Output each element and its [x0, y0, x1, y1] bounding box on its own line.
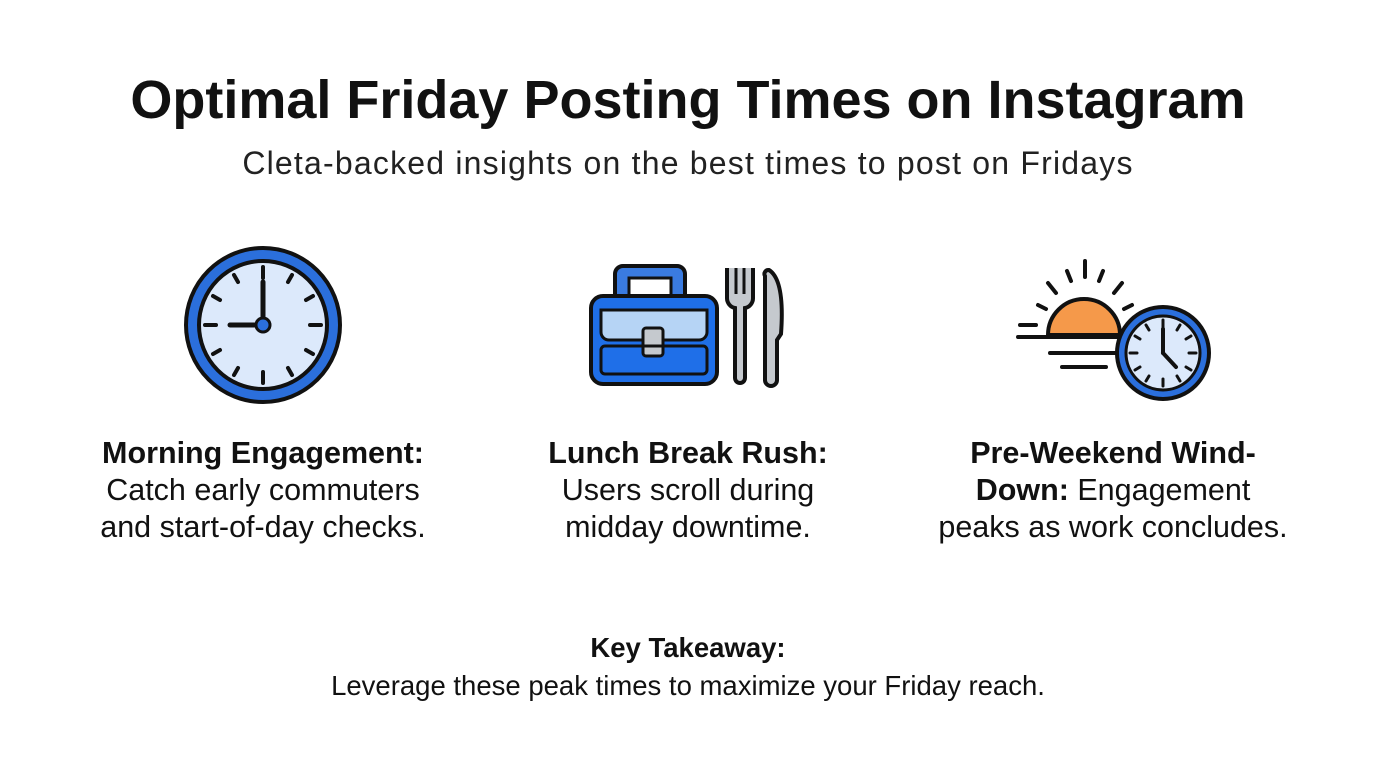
- caption: pre-weekend: peaks as work concludes.: [938, 510, 1288, 544]
- subtitle: Cleta-backed insights on the best times to post on Fridays: [242, 145, 1134, 181]
- caption: lunch: Users scroll during: [562, 473, 814, 507]
- caption: pre-weekend: Down: Engagement: [976, 473, 1250, 507]
- caption: lunch: Lunch Break Rush:: [548, 436, 828, 470]
- caption: morning: [100, 436, 426, 544]
- caption: pre-weekend: Pre-Weekend Wind-: [970, 436, 1256, 470]
- caption: morning: Catch early commuters: [106, 473, 420, 507]
- icon: sunset with clock: [1016, 259, 1211, 401]
- caption: morning: Morning Engagement:: [102, 436, 424, 470]
- caption: pre-weekend: [938, 436, 1288, 544]
- caption: morning: and start-of-day checks.: [100, 510, 426, 544]
- caption: lunch: midday downtime.: [565, 510, 811, 544]
- key takeaway: Key Takeaway:: [590, 632, 786, 663]
- title: Optimal Friday Posting Times on Instagram: [130, 70, 1246, 130]
- key takeaway: [331, 632, 1045, 701]
- caption: lunch: [548, 436, 828, 544]
- icon: briefcase and cutlery: [589, 264, 784, 388]
- icon: morning clock: [184, 246, 342, 404]
- key takeaway: Leverage these peak times to maximize your Friday reach.: [331, 670, 1045, 701]
